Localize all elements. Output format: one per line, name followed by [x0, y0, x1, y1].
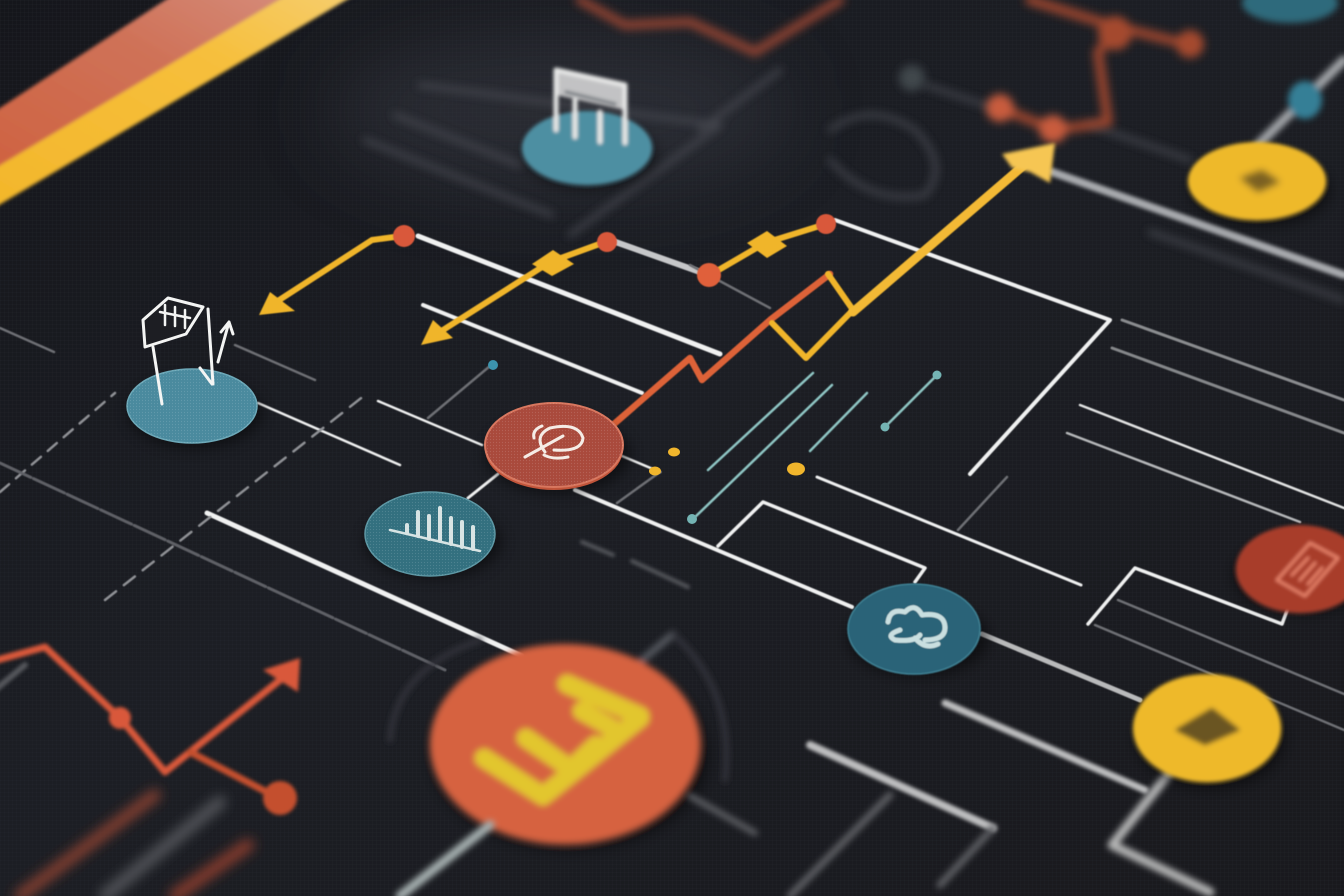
node: red centre — [485, 403, 630, 493]
small dots — [488, 360, 942, 524]
node: large orange with bar chart icon — [390, 634, 726, 849]
yellow arrow: left — [259, 225, 415, 315]
grey secondary lines — [0, 265, 1344, 730]
faint background lines, upper — [365, 70, 1344, 300]
node: teal, right with cloud icon — [848, 584, 988, 676]
orange growth line — [614, 274, 830, 424]
bottom left blurred bars — [20, 795, 248, 896]
bottom left orange chart with arrows — [0, 647, 300, 815]
node: yellow, lower right — [1112, 674, 1284, 892]
top right teal dots and white stripe — [1242, 0, 1344, 145]
teal tick lines — [692, 373, 937, 520]
yellow rising arrow — [772, 274, 853, 358]
yellow arrow head, softened — [853, 143, 1055, 312]
main white frame lines — [207, 220, 1288, 700]
short blurred dashes — [582, 542, 688, 587]
yellow arrow: upper centre — [697, 214, 836, 287]
node: teal, top with document icon — [522, 70, 656, 189]
blurred lower right lines — [810, 703, 1145, 828]
top right red network — [899, 0, 1204, 143]
node: yellow, top right — [1188, 142, 1330, 226]
node: red, right edge — [1234, 525, 1344, 613]
yellow arrow: middle left — [421, 232, 617, 345]
dashed lines left — [0, 393, 445, 670]
top red chart, blurred — [580, 0, 840, 52]
corner stripes: orange and yellow — [0, 0, 380, 228]
node: teal bars — [365, 492, 501, 578]
white connector lines, right — [1052, 172, 1344, 522]
node: teal, left with sign icon — [127, 298, 261, 447]
